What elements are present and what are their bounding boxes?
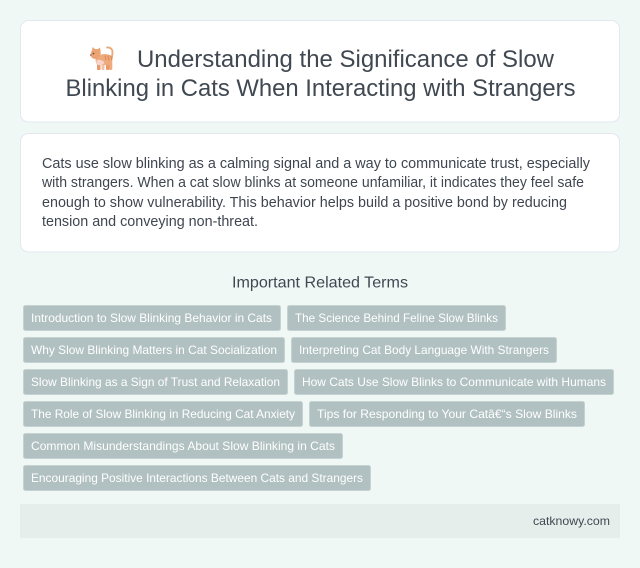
description text xyxy=(41,156,591,230)
icon: cat xyxy=(90,47,112,70)
tag: The Role of Slow Blinking in Reducing Cat Anxiety xyxy=(31,407,295,421)
footer source: catknowy.com xyxy=(533,514,610,528)
description text: enough to show vulnerability. This behavior helps build a positive bond by reducing xyxy=(42,195,567,211)
description text: with strangers. When a cat slow blinks at someone unfamiliar, it indicates they feel safe xyxy=(41,175,584,191)
tag: Why Slow Blinking Matters in Cat Socialization xyxy=(31,343,277,357)
tag xyxy=(24,434,342,458)
tag: Slow Blinking as a Sign of Trust and Relaxation xyxy=(31,375,280,389)
tag xyxy=(24,370,288,394)
tag: Tips for Responding to Your Catâ€“s Slow Blinks xyxy=(317,407,577,421)
heading: related terms: Important Related Terms xyxy=(232,274,408,292)
tag: Encouraging Positive Interactions Between Cats and Strangers xyxy=(31,471,363,485)
tag xyxy=(24,402,302,426)
tag: The Science Behind Feline Slow Blinks xyxy=(295,311,498,325)
tag xyxy=(24,466,370,490)
tag xyxy=(310,402,584,426)
tag xyxy=(24,306,280,330)
tag xyxy=(24,338,284,362)
tag: Common Misunderstandings About Slow Blinking in Cats xyxy=(31,439,335,453)
description text: tension and conveying non-threat. xyxy=(42,214,258,230)
panel: description xyxy=(20,134,620,252)
tag xyxy=(288,306,506,330)
tag: How Cats Use Slow Blinks to Communicate with Humans xyxy=(302,375,606,389)
title: Understanding the Significance of Slow xyxy=(137,46,554,73)
related term tags xyxy=(24,306,614,490)
tag: Interpreting Cat Body Language With Strangers xyxy=(299,343,549,357)
tag xyxy=(292,338,556,362)
tag xyxy=(294,370,614,394)
panel: header xyxy=(20,20,620,122)
title xyxy=(66,46,576,102)
footer xyxy=(20,504,620,538)
description text: Cats use slow blinking as a calming signal and a way to communicate trust, especially xyxy=(42,156,591,172)
title: Blinking in Cats When Interacting with Strangers xyxy=(66,75,576,102)
tag: Introduction to Slow Blinking Behavior in Cats xyxy=(31,311,272,325)
